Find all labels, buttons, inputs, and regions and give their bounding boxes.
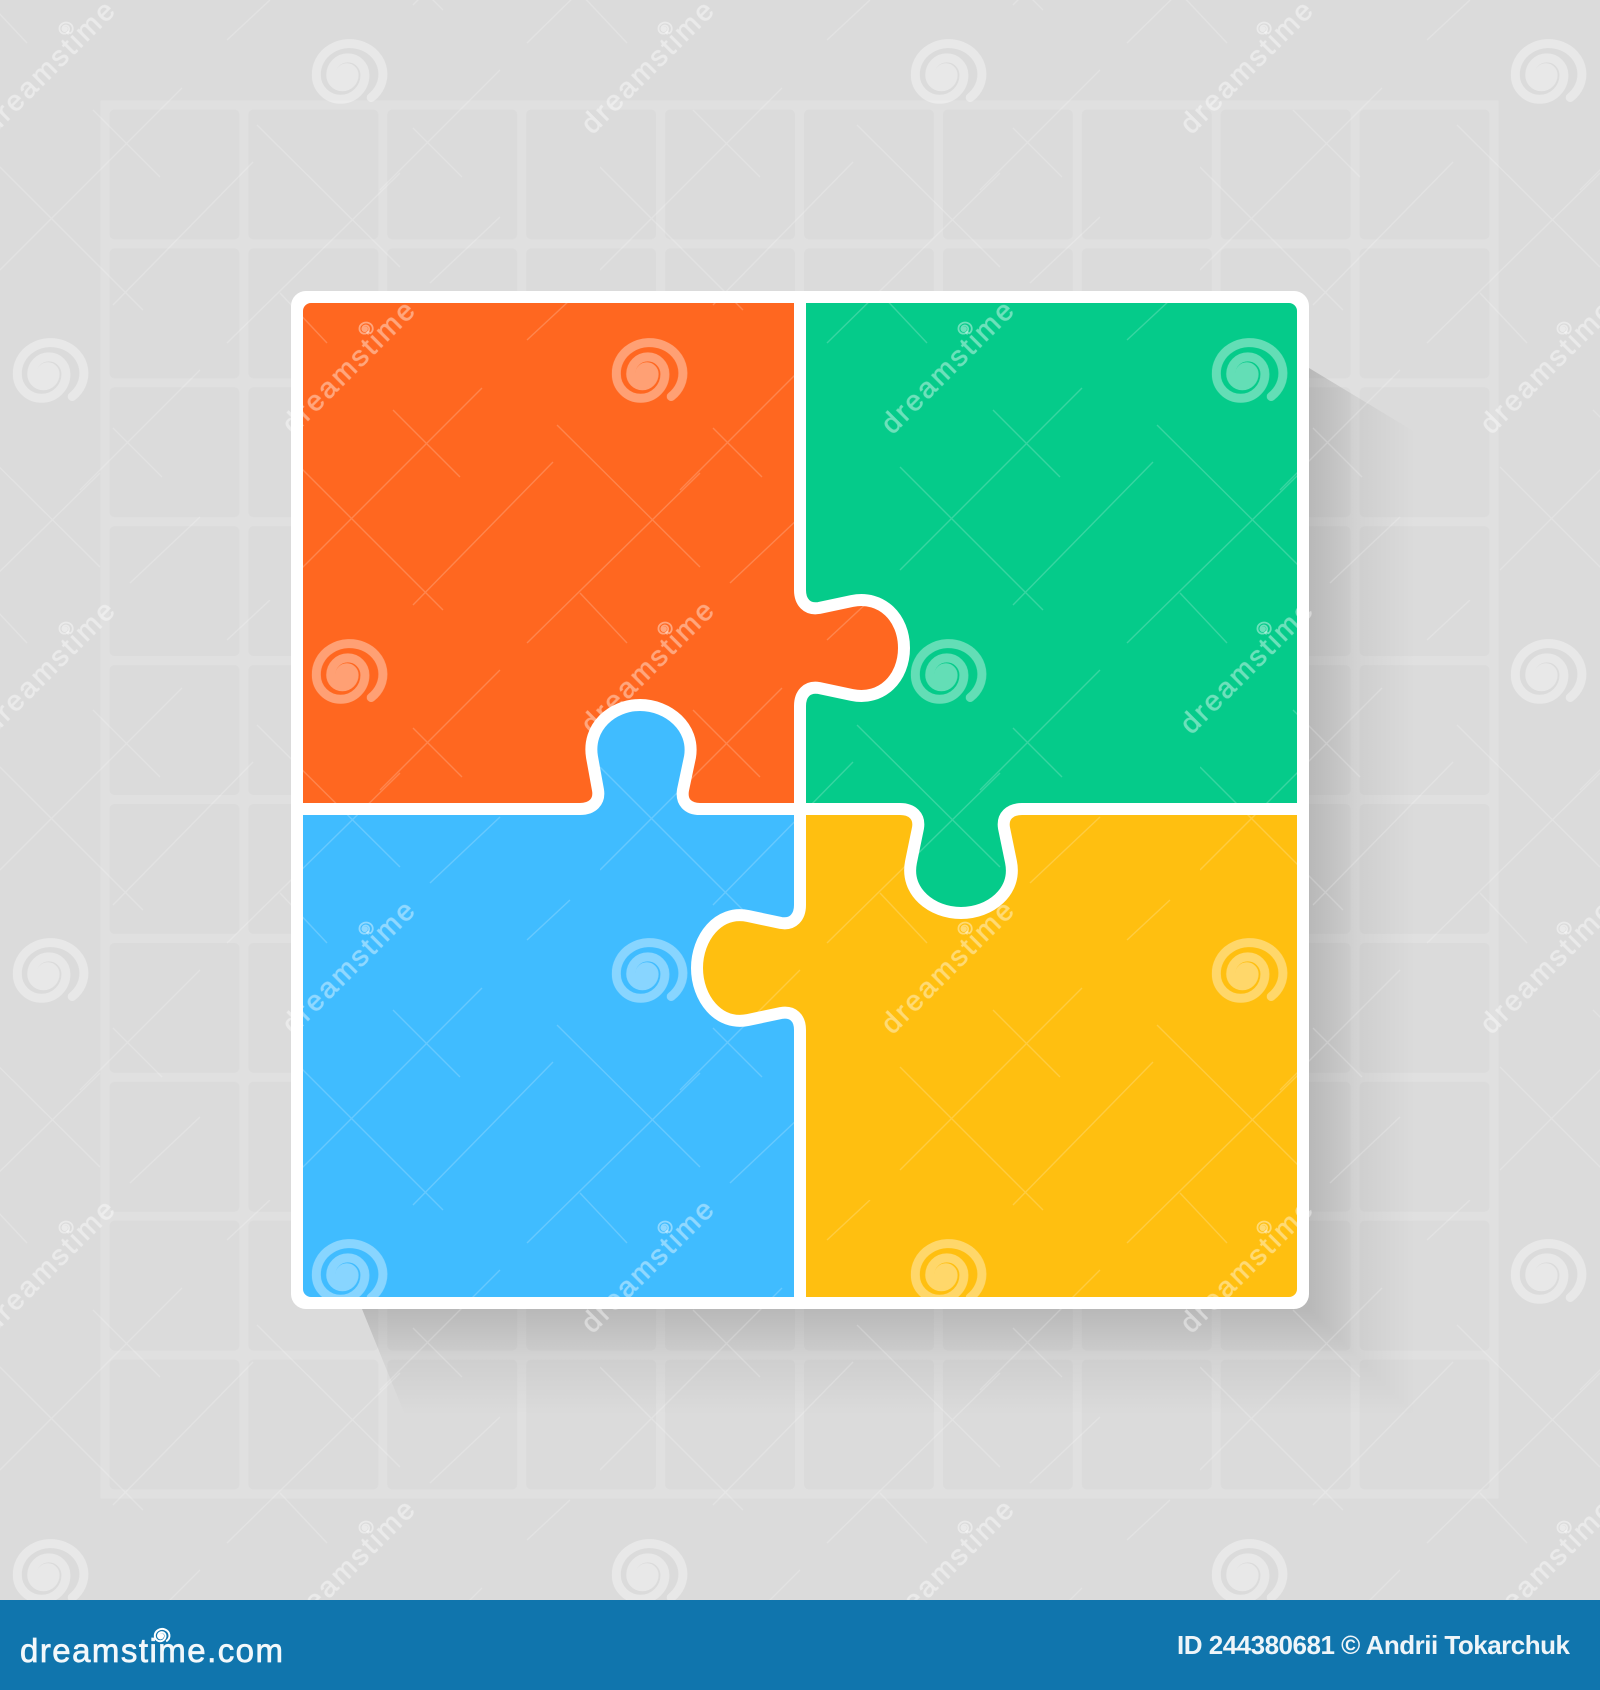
watermark text: dreamstime (575, 1194, 720, 1339)
footer credit: ID 244380681 © Andrii Tokarchuk (1177, 1630, 1571, 1660)
watermark text: dreamstime (1174, 1194, 1319, 1339)
watermark text: dreamstime (276, 1494, 421, 1639)
background grid (100, 100, 1498, 1498)
piece: yellow (697, 809, 1303, 1303)
white outer frame (291, 291, 1309, 1309)
watermark text: dreamstime (575, 595, 720, 740)
watermark text: dreamstime (276, 895, 421, 1040)
footer bar (0, 1600, 1600, 1690)
watermark text: dreamstime (875, 1494, 1020, 1639)
piece: blue (297, 705, 800, 1303)
watermark text: dreamstime (276, 295, 421, 440)
watermark text: dreamstime (1174, 595, 1319, 740)
piece: orange (297, 297, 904, 809)
watermark text: dreamstime (875, 895, 1020, 1040)
white seams (297, 297, 1303, 1303)
piece: green (800, 297, 1303, 913)
watermark text: dreamstime (875, 295, 1020, 440)
puzzle (291, 291, 1309, 1309)
footer logo: dreamstime.com (20, 1632, 283, 1669)
long shadow (362, 360, 1415, 1415)
